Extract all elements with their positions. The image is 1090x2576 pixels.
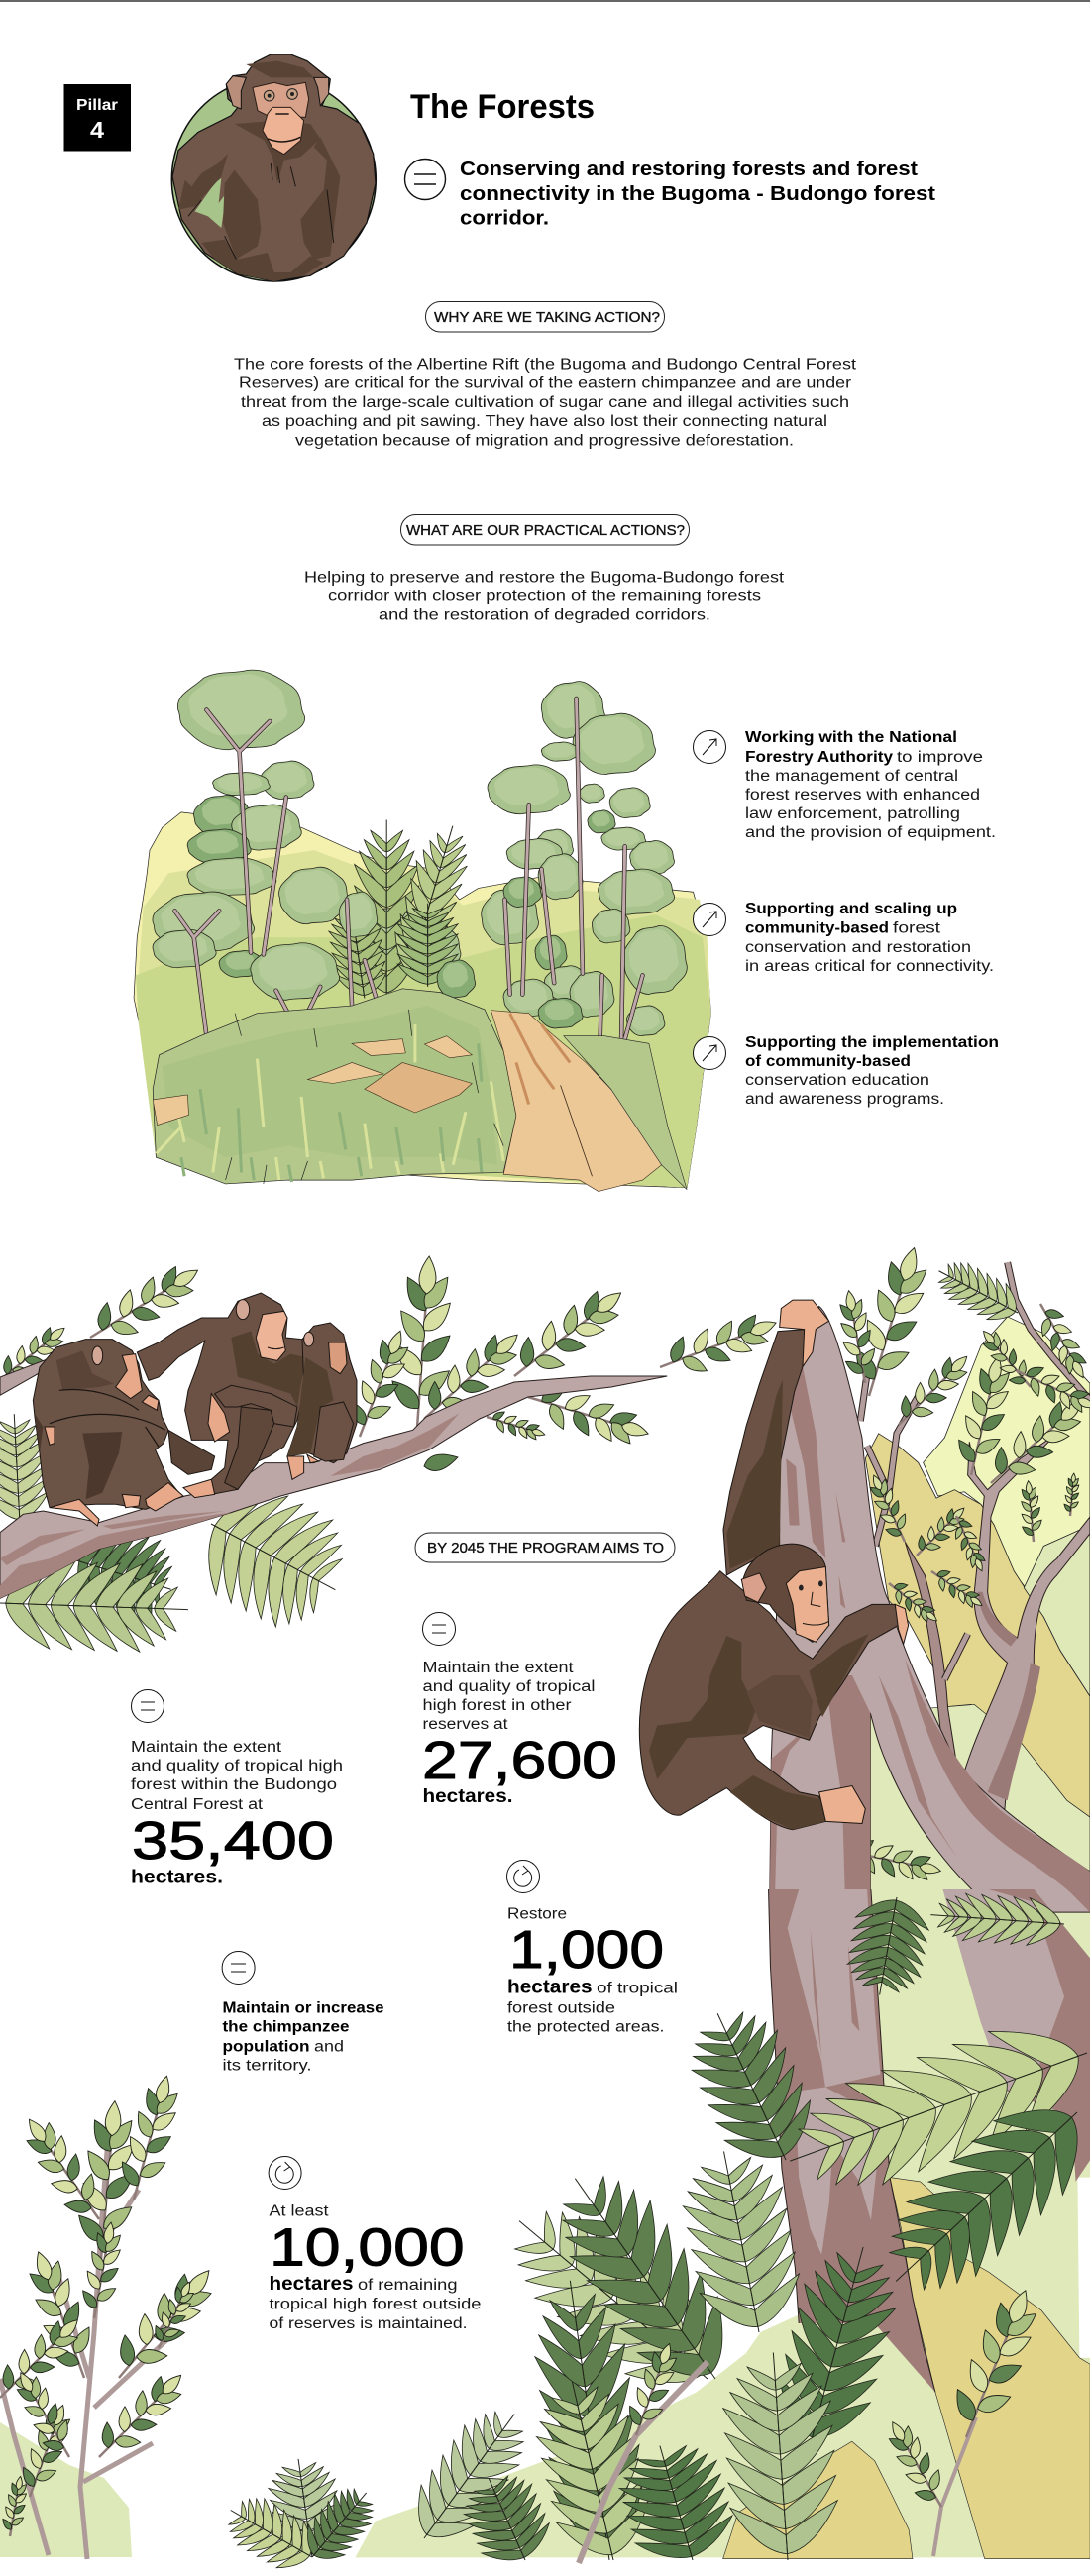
text block: why paragraph: vegetation because of migration and progressive deforestation. bbox=[295, 432, 794, 450]
icon: restore arrow bbox=[507, 1861, 539, 1892]
action 3: of community-based bbox=[745, 1053, 911, 1070]
pillar badge bbox=[63, 84, 131, 151]
text block: actions paragraph: corridor with closer protection of the remaining forests bbox=[328, 589, 761, 604]
icon: equals bbox=[131, 1690, 164, 1722]
landscape background: right side bbox=[355, 1317, 1090, 2559]
branch bbox=[0, 1359, 667, 1598]
action 1: Forestry Authority bbox=[745, 749, 893, 766]
action 2: Supporting and scaling up bbox=[745, 901, 957, 917]
icon: arrow bbox=[694, 1036, 725, 1070]
target: 35,400 hectares: forest within the Budongo bbox=[131, 1776, 337, 1793]
pillar badge: Pillar bbox=[76, 97, 118, 114]
icon: restore arrow bbox=[269, 2156, 301, 2190]
tree branches: right side bbox=[860, 1262, 1090, 1817]
subtitle block with equals icon bbox=[404, 159, 935, 230]
chimpanzee climbing bbox=[639, 1300, 909, 1830]
chimp right bbox=[287, 1323, 357, 1479]
target: 10,000 hectares bbox=[269, 2156, 482, 2332]
action 1: forest reserves with enhanced bbox=[745, 787, 980, 804]
target: 27,600 hectares: 27,600 bbox=[422, 1731, 617, 1790]
heading pill: why bbox=[426, 301, 664, 332]
action 1: and the provision of equipment. bbox=[745, 824, 996, 841]
target: 10,000 hectares: of remaining bbox=[358, 2277, 458, 2294]
target: 35,400 hectares: hectares. bbox=[131, 1867, 223, 1888]
target: 35,400 hectares bbox=[131, 1690, 343, 1888]
text block: why paragraph: The core forests of the Albertine Rift (the Bugoma and Budongo Central Forest bbox=[234, 357, 857, 373]
heading pill: practical actions bbox=[400, 515, 690, 545]
action 1: law enforcement, patrolling bbox=[745, 805, 960, 822]
target: 10,000 hectares: At least bbox=[270, 2203, 329, 2220]
chimp left bbox=[33, 1340, 183, 1526]
central palm foliage bbox=[326, 820, 478, 1000]
forest illustration bbox=[134, 670, 710, 1192]
list: practical actions bbox=[694, 729, 999, 1108]
text block: actions paragraph: Helping to preserve and restore the Bugoma-Budongo forest bbox=[304, 569, 785, 587]
leaf sprigs: right side bbox=[830, 1239, 1090, 1889]
target: 10,000 hectares: hectares bbox=[270, 2274, 353, 2295]
action 2: forest bbox=[893, 919, 941, 937]
heading pill: by 2045: BY 2045 THE PROGRAM AIMS TO bbox=[427, 1541, 664, 1556]
target: 10,000 hectares: of reserves is maintained. bbox=[270, 2315, 468, 2332]
chimp middle bbox=[137, 1293, 307, 1498]
action 1: the management of central bbox=[745, 768, 958, 785]
target: chimpanzee population: and bbox=[314, 2039, 344, 2055]
target: 27,600 hectares: reserves at bbox=[422, 1716, 508, 1733]
target: restore 1,000 hectares: hectares bbox=[507, 1978, 593, 1997]
action 2 bbox=[694, 901, 994, 975]
subtitle text: connectivity in the Bugoma - Budongo forest bbox=[460, 183, 935, 205]
dirt patches bbox=[153, 1036, 472, 1126]
pillar badge: 4 bbox=[90, 117, 104, 143]
foliage: left trees bbox=[153, 670, 476, 1000]
action 3: conservation education bbox=[745, 1072, 929, 1089]
target: chimpanzee population: Maintain or increase bbox=[222, 1999, 384, 2017]
icon: arrow bbox=[694, 731, 725, 763]
text block: actions paragraph: and the restoration of degraded corridors. bbox=[379, 606, 710, 624]
text block: why paragraph: threat from the large-scale cultivation of sugar cane and illegal activities such bbox=[241, 394, 849, 411]
palm fronds bbox=[0, 1413, 364, 1654]
group of chimpanzees on branch bbox=[0, 1249, 785, 1654]
action 2: in areas critical for connectivity. bbox=[745, 958, 994, 975]
title: The Forests bbox=[410, 88, 595, 126]
right verge grass bbox=[564, 1036, 687, 1190]
target: restore 1,000 hectares: 1,000 bbox=[509, 1920, 664, 1980]
big tree trunk bbox=[769, 1306, 1090, 2392]
icon: chimpanzee portrait in green circle bbox=[171, 54, 376, 281]
target: restore 1,000 hectares bbox=[507, 1861, 678, 2035]
action 3 bbox=[694, 1034, 999, 1108]
action 2: conservation and restoration bbox=[745, 939, 971, 956]
heading pill: practical actions: WHAT ARE OUR PRACTICAL ACTIONS? bbox=[406, 523, 685, 539]
action 3: and awareness programs. bbox=[745, 1091, 944, 1108]
target: 27,600 hectares: high forest in other bbox=[422, 1697, 571, 1714]
target: chimpanzee population bbox=[222, 1952, 384, 2075]
subtitle text: corridor. bbox=[460, 208, 549, 230]
subtitle text: Conserving and restoring forests and forest bbox=[460, 159, 918, 180]
dirt road bbox=[490, 1011, 662, 1192]
text block: why paragraph: Reserves) are critical for the survival of the eastern chimpanzee and are under bbox=[239, 375, 852, 392]
heading pill: by 2045 bbox=[415, 1533, 675, 1562]
foliage: right trees bbox=[482, 682, 687, 1036]
icon: arrow bbox=[694, 904, 725, 935]
target: 10,000 hectares: 10,000 bbox=[270, 2217, 465, 2277]
target: 27,600 hectares: and quality of tropical bbox=[422, 1678, 595, 1695]
lower left tree bbox=[0, 2070, 230, 2559]
action 1 bbox=[694, 729, 996, 841]
action 3: Supporting the implementation bbox=[745, 1034, 999, 1051]
icon: equals bbox=[422, 1613, 456, 1645]
target: restore 1,000 hectares: Restore bbox=[507, 1906, 567, 1922]
action 2: community-based bbox=[745, 919, 889, 937]
icon: equals bbox=[404, 159, 446, 200]
subtitle text bbox=[460, 159, 935, 230]
text block: actions paragraph bbox=[304, 569, 785, 624]
target: 35,400 hectares: and quality of tropical high bbox=[131, 1758, 343, 1774]
grass mound bbox=[153, 989, 516, 1184]
leaf sprigs behind chimps bbox=[0, 1249, 785, 1474]
icon: equals bbox=[222, 1952, 255, 1984]
text block: why paragraph: as poaching and pit sawing. They have also lost their connecting natural bbox=[262, 413, 827, 430]
target: 27,600 hectares bbox=[422, 1613, 617, 1807]
target: chimpanzee population: its territory. bbox=[222, 2058, 311, 2075]
target: 10,000 hectares: tropical high forest outside bbox=[270, 2297, 482, 2313]
target: chimpanzee population: the chimpanzee bbox=[222, 2019, 350, 2035]
ground fronds and foliage bbox=[217, 1891, 1090, 2576]
target: chimpanzee population: population bbox=[222, 2039, 309, 2055]
action 1: Working with the National bbox=[745, 729, 957, 746]
target: 27,600 hectares: hectares. bbox=[422, 1786, 513, 1807]
target: restore 1,000 hectares: of tropical bbox=[597, 1980, 678, 1997]
heading pill: why: WHY ARE WE TAKING ACTION? bbox=[434, 310, 660, 326]
action 1: to improve bbox=[897, 749, 983, 766]
target: restore 1,000 hectares: forest outside bbox=[507, 1999, 615, 2017]
trunks bbox=[175, 698, 643, 1093]
text block: why paragraph bbox=[234, 357, 857, 450]
target: 35,400 hectares: 35,400 bbox=[132, 1811, 334, 1871]
target: 27,600 hectares: Maintain the extent bbox=[422, 1660, 574, 1676]
target: 35,400 hectares: Central Forest at bbox=[131, 1796, 264, 1813]
top rule bbox=[0, 0, 1090, 2]
target: restore 1,000 hectares: the protected areas. bbox=[507, 2019, 664, 2035]
target: 35,400 hectares: Maintain the extent bbox=[131, 1739, 282, 1756]
